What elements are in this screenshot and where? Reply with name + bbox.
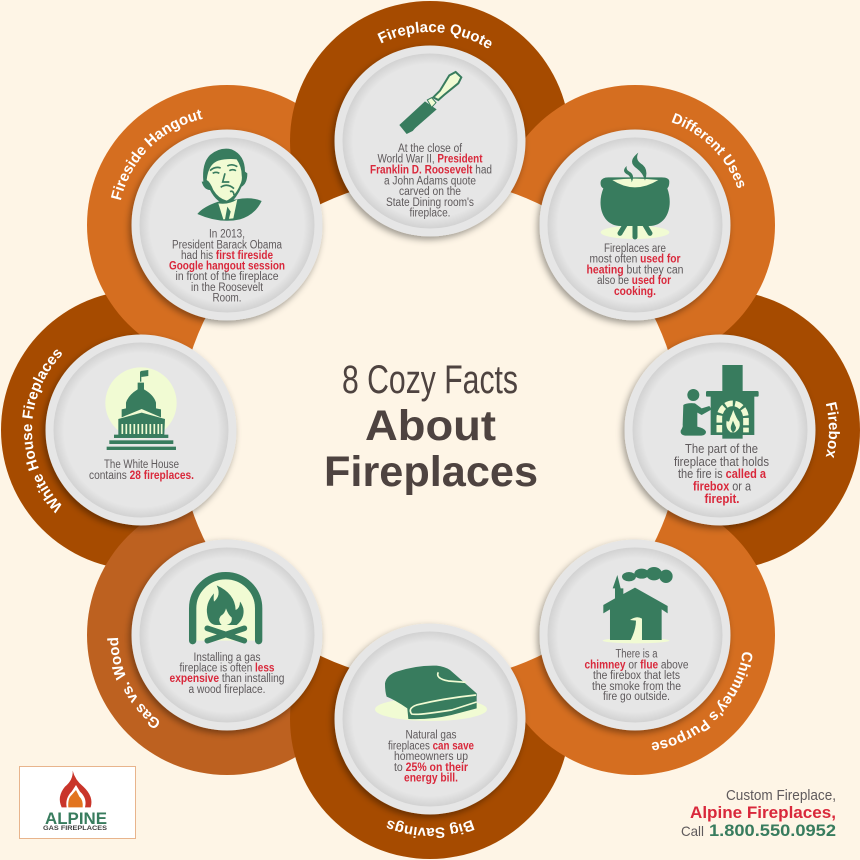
contact text: Custom Fireplace, [726, 788, 836, 804]
title: About [365, 402, 496, 450]
panel: white house fireplaces [22, 334, 239, 532]
text block: World War II, President [378, 154, 483, 166]
text block: in front of the fireplace [176, 271, 278, 283]
panel: big savings [329, 622, 528, 838]
text block: The White House [104, 459, 179, 471]
text block: fireplaces can save [388, 740, 474, 752]
text block: Room. [212, 292, 242, 304]
contact text: Call [681, 823, 704, 839]
panel: fireside hangout [110, 110, 325, 328]
icon: wallet [375, 666, 487, 721]
text block: firepit. [704, 492, 740, 506]
heading: White House Fireplaces [22, 350, 62, 514]
icon: cauldron [601, 153, 670, 239]
contact text: 1.800.550.0952 [709, 821, 836, 840]
text block: fire go outside. [603, 691, 670, 703]
text block: chimney or flue above [584, 660, 688, 672]
panel: chimney's purpose [533, 538, 752, 750]
text block: also be used for [597, 275, 671, 287]
text block: firebox or a [693, 480, 751, 494]
heading: Fireside Hangout [110, 110, 203, 200]
text block: carved on the [399, 186, 461, 198]
icon: flame [60, 771, 91, 807]
heading: Chimney's Purpose [652, 652, 752, 750]
panel: different uses [533, 113, 744, 328]
contact text: Alpine Fireplaces, [690, 803, 836, 822]
title: 8 Cozy Facts [342, 358, 518, 402]
logo wordmark: ALPINE [45, 809, 107, 828]
logo subtitle: GAS FIREPLACES [43, 826, 107, 832]
heading: Big Savings [386, 820, 474, 838]
icon: portrait [197, 149, 262, 221]
text block: fireplace is often less [180, 662, 274, 674]
heading: Gas vs. Wood [107, 638, 160, 728]
contact text [681, 788, 836, 840]
logo [20, 766, 136, 838]
text block: had his first fireside [181, 250, 273, 262]
icon: person at fireplace [681, 365, 759, 439]
text block: President Barack Obama [172, 240, 283, 252]
text block [169, 228, 285, 304]
text block: the fire is called a [678, 467, 767, 481]
text block: most often used for [590, 254, 681, 266]
text block [584, 648, 688, 703]
text block: Google hangout session [169, 260, 285, 272]
text block: in the Roosevelt [191, 282, 264, 294]
icon: fire in arch [193, 576, 259, 641]
icon: house with smoke [603, 567, 673, 643]
text block: expensive than installing [170, 673, 284, 685]
text block: homeowners up [394, 751, 468, 763]
title: Fireplaces [324, 448, 538, 496]
text block [89, 459, 194, 482]
text block: the firebox that lets [593, 670, 680, 682]
text block: to 25% on their [394, 762, 468, 774]
text block [674, 442, 769, 506]
text block: a John Adams quote [384, 176, 476, 188]
text block [170, 652, 284, 696]
text block: The part of the [685, 442, 758, 456]
text block: contains 28 fireplaces. [89, 470, 194, 482]
text block: Fireplaces are [604, 243, 666, 255]
text block: energy bill. [404, 772, 458, 784]
text block: In 2013, [209, 228, 245, 240]
text block: There is a [616, 648, 658, 660]
panel: gas vs. wood [107, 538, 325, 738]
text block: State Dining room's [386, 197, 474, 209]
text block: the smoke from the [592, 681, 681, 693]
text block: fireplace that holds [674, 455, 769, 469]
text block: Natural gas [406, 730, 457, 742]
text block: fireplace. [410, 208, 450, 220]
text block: a wood fireplace. [188, 684, 266, 696]
text block [586, 243, 684, 298]
text block: Installing a gas [194, 652, 261, 664]
text block: At the close of [398, 143, 463, 155]
panel: firebox [618, 334, 840, 532]
text block: cooking. [614, 286, 656, 298]
text block [388, 730, 474, 784]
text block [370, 143, 492, 220]
text block: heating but they can [586, 264, 684, 276]
icon: white house dome [105, 367, 177, 450]
icon: chisel [399, 72, 461, 134]
panel: fireplace quote [329, 22, 528, 244]
heading: Fireplace Quote [377, 22, 492, 48]
heading: Firebox [826, 402, 840, 458]
text block: Franklin D. Roosevelt had [370, 164, 492, 176]
heading: Different Uses [672, 113, 744, 188]
title [324, 358, 538, 496]
